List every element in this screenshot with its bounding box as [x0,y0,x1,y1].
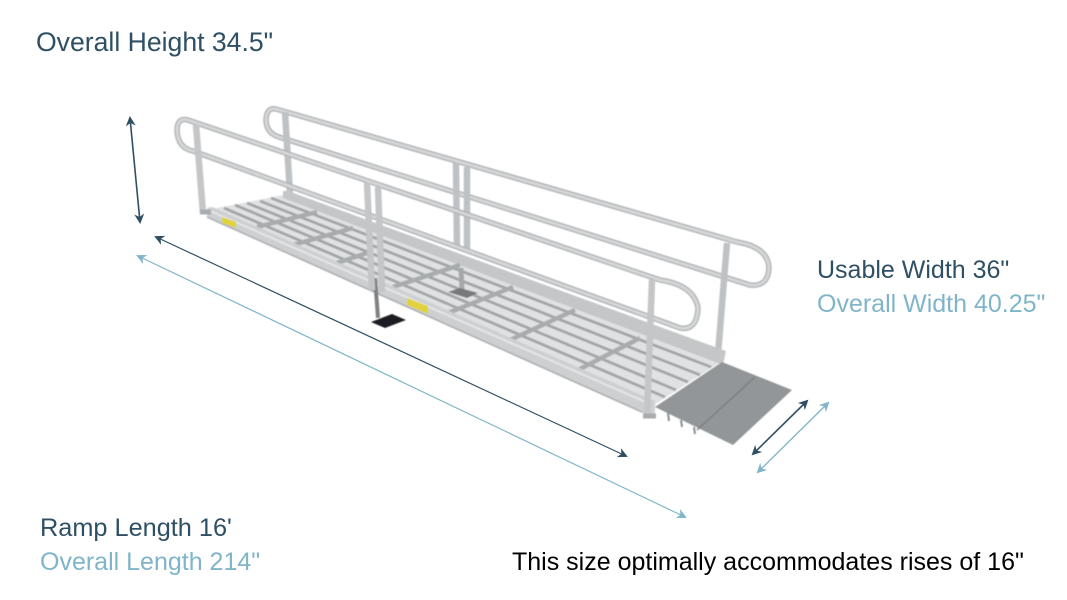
arrow: height [130,118,140,222]
deck cross braces [257,212,640,370]
transition plate [655,362,792,445]
deck longitudinal slats [224,198,711,397]
ramp illustration [177,109,792,445]
front support jack [371,278,406,328]
arrow: ramp length [156,237,626,456]
title: overall height label: Overall Height 34.5" [36,27,273,57]
deck side beam [207,207,655,417]
arrow: usable width [753,401,807,454]
label: usable width: Usable Width 36" [817,256,1009,284]
deck far curb [283,191,726,365]
yellow labels [222,217,428,314]
arrow: overall width [758,403,828,472]
note: rise accommodation: This size optimally accommodates rises of 16" [512,548,1024,576]
label: ramp length: Ramp Length 16' [40,514,232,542]
label: overall width: Overall Width 40.25" [817,290,1045,318]
arrow: overall length [138,256,685,517]
far handrail [266,109,769,354]
label: overall length: Overall Length 214" [40,548,260,576]
rear support jack [448,268,478,298]
deck surface [212,195,724,405]
near handrail [177,119,698,416]
